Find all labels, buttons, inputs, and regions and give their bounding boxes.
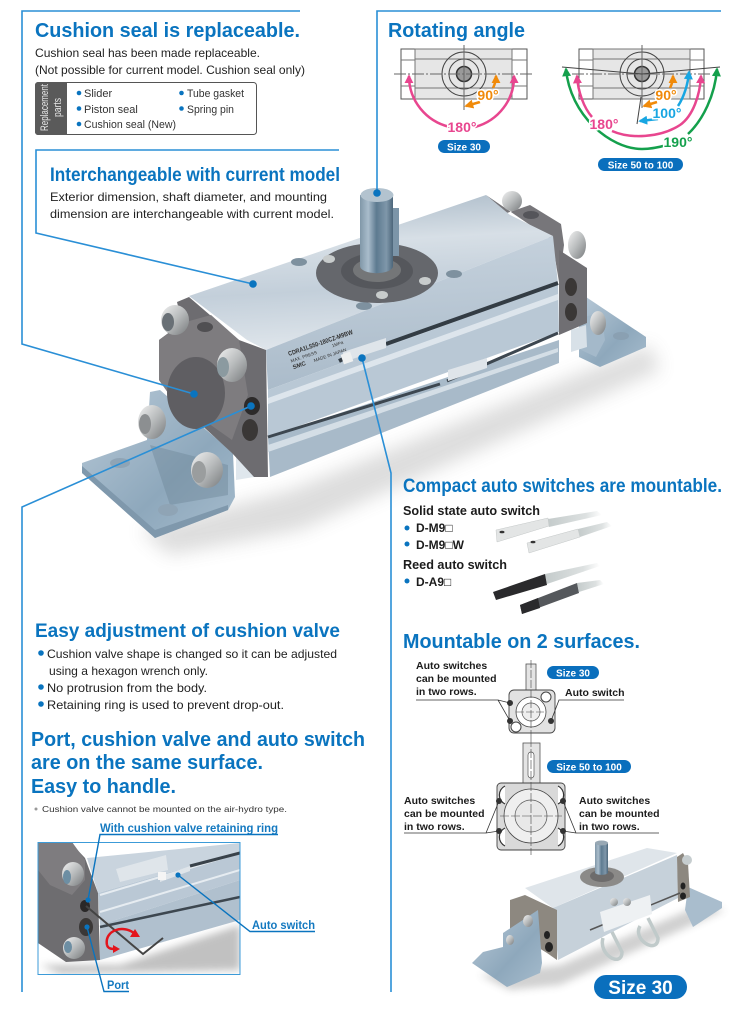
size label: size 30 <box>438 140 490 154</box>
callout: with cushion valve retaining ring: With cushion valve retaining ring <box>100 821 278 835</box>
panel: replacement parts: Slider <box>84 88 112 100</box>
text block: auto switch types: Reed auto switch <box>403 557 507 572</box>
panel: replacement parts: Spring pin <box>187 104 234 116</box>
text block: auto switch types: D-M9□W <box>416 538 465 552</box>
heading: port, cushion valve and auto switch: are on the same surface. <box>31 752 263 774</box>
text block: auto switch types: D-A9□ <box>416 575 451 589</box>
text block: interchangeable description: dimension are interchangeable with current model. <box>50 207 334 221</box>
label: auto switches two rows, left <box>404 795 499 833</box>
heading: port, cushion valve and auto switch: Port, cushion valve and auto switch <box>31 729 365 751</box>
text block: interchangeable description: Exterior dimension, shaft diameter, and mounting <box>50 190 327 204</box>
panel: replacement parts: Cushion seal (New) <box>84 119 176 131</box>
heading: port, cushion valve and auto switch <box>31 729 365 798</box>
icon: solid state auto switches <box>496 511 612 553</box>
icon: reed auto switches <box>493 563 604 614</box>
text block: cushion seal description: Cushion seal has been made replaceable. <box>35 46 260 60</box>
panel: replacement parts: Piston seal <box>84 104 138 116</box>
text block: auto switch types: Solid state auto switch <box>403 503 540 518</box>
diagram: rotating angle size 50 to 100: 190° <box>664 134 692 150</box>
label: auto switches two rows, right: can be mounted <box>579 808 660 820</box>
panel: replacement parts: Replacement <box>39 84 51 131</box>
size label: size 30 large: Size 30 <box>608 978 673 999</box>
label: auto switches two rows, left: in two rows. <box>404 821 465 833</box>
diagram: rotating angle size 30: 90° <box>477 87 499 103</box>
heading: cushion seal: Cushion seal is replaceable. <box>35 20 300 42</box>
callout: port: Port <box>107 978 129 992</box>
text block: cushion seal description <box>35 46 305 77</box>
label: auto switches two rows, size 30: Auto switches <box>416 660 487 672</box>
size label: size 50 to 100 mount: Size 50 to 100 <box>556 762 622 774</box>
detail photo: cushion valve close-up <box>38 842 240 974</box>
heading: interchangeable: Interchangeable with current model <box>50 165 340 186</box>
diagram: rotating angle size 50 to 100: 100° <box>653 105 681 121</box>
diagram: rotating angle size 30: 180° <box>448 119 476 135</box>
heading: mountable on 2 surfaces: Mountable on 2 surfaces. <box>403 631 640 653</box>
size label: size 50 to 100: Size 50 to 100 <box>608 160 674 172</box>
callout: port <box>84 924 129 992</box>
bottom product photo: size 30 actuator <box>472 840 725 990</box>
panel: replacement parts <box>35 82 256 135</box>
main product photo: rotary actuator: CDRA1LS50-180CZ-M9BW <box>287 329 355 358</box>
leader dots on the main photo <box>190 189 381 410</box>
callout: auto switch: Auto switch <box>252 918 315 932</box>
main product photo: rotary actuator: MAX. PRESS <box>290 350 318 364</box>
callout: with cushion valve retaining ring <box>85 821 278 903</box>
text block: auto switch types <box>403 503 540 589</box>
text block: auto switch types: D-M9□ <box>416 521 453 535</box>
size label: size 50 to 100 <box>598 158 683 172</box>
text block: footnote: Cushion valve cannot be mounted on the air-hydro type. <box>42 804 287 814</box>
panel: replacement parts: Tube gasket <box>187 88 244 100</box>
heading: rotating angle: Rotating angle <box>388 20 525 42</box>
label: auto switches two rows, left: Auto switches <box>404 795 475 807</box>
diagram: rotating angle size 50 to 100: 90° <box>655 87 677 103</box>
label: auto switches two rows, right: Auto switches <box>579 795 650 807</box>
main product photo: rotary actuator: SMC <box>292 361 307 371</box>
diagram: rotating angle size 30 <box>394 45 532 135</box>
main product photo: rotary actuator: 1MPa <box>331 340 344 348</box>
heading: easy adjustment: Easy adjustment of cushion valve <box>35 621 340 642</box>
panel frame: interchangeable leader line <box>36 150 339 284</box>
label: auto switches two rows, right: in two rows. <box>579 821 640 833</box>
label: auto switches two rows, size 30: in two rows. <box>416 686 477 698</box>
size label: size 30 mount <box>547 666 599 680</box>
text block: interchangeable description <box>50 190 334 221</box>
label: auto switch: Auto switch <box>565 687 624 699</box>
label: auto switches two rows, size 30: can be mounted <box>416 673 497 685</box>
panel frame: rotating angle leader line <box>377 11 721 193</box>
panel: replacement parts: parts <box>52 98 64 117</box>
panel frame: port and cushion valve leader line <box>22 406 251 992</box>
main product photo: rotary actuator <box>82 188 660 555</box>
label: auto switches two rows, right <box>563 795 660 833</box>
label: auto switches two rows, left: can be mounted <box>404 808 485 820</box>
size label: size 30 large <box>594 975 687 999</box>
diagram: size 30 end view <box>507 660 555 738</box>
diagram: rotating angle size 50 to 100 <box>562 45 720 150</box>
diagram: size 50 to 100 end view <box>496 738 566 855</box>
label: auto switches two rows, size 30 <box>416 660 510 721</box>
panel frame: cushion seal leader line <box>22 11 300 394</box>
size label: size 30: Size 30 <box>447 142 481 154</box>
text block: easy adjustment bullets: No protrusion from the body. <box>47 681 207 695</box>
diagram: rotating angle size 50 to 100: 180° <box>590 116 618 132</box>
text block: easy adjustment bullets: Cushion valve shape is changed so it can be adjusted <box>47 647 337 661</box>
callout: auto switch <box>175 872 315 932</box>
size label: size 30 mount: Size 30 <box>556 668 590 680</box>
text block: easy adjustment bullets <box>38 647 337 712</box>
text block: easy adjustment bullets: Retaining ring is used to prevent drop-out. <box>47 698 284 712</box>
heading: port, cushion valve and auto switch: Easy to handle. <box>31 776 176 798</box>
panel frame: auto switch leader line <box>362 358 391 992</box>
text block: easy adjustment bullets: using a hexagon wrench only. <box>49 664 208 678</box>
size label: size 50 to 100 mount <box>547 760 631 774</box>
main product photo: rotary actuator: MADE IN JAPAN <box>313 347 347 363</box>
label: auto switch <box>551 687 624 721</box>
text block: cushion seal description: (Not possible for current model. Cushion seal only) <box>35 63 305 77</box>
